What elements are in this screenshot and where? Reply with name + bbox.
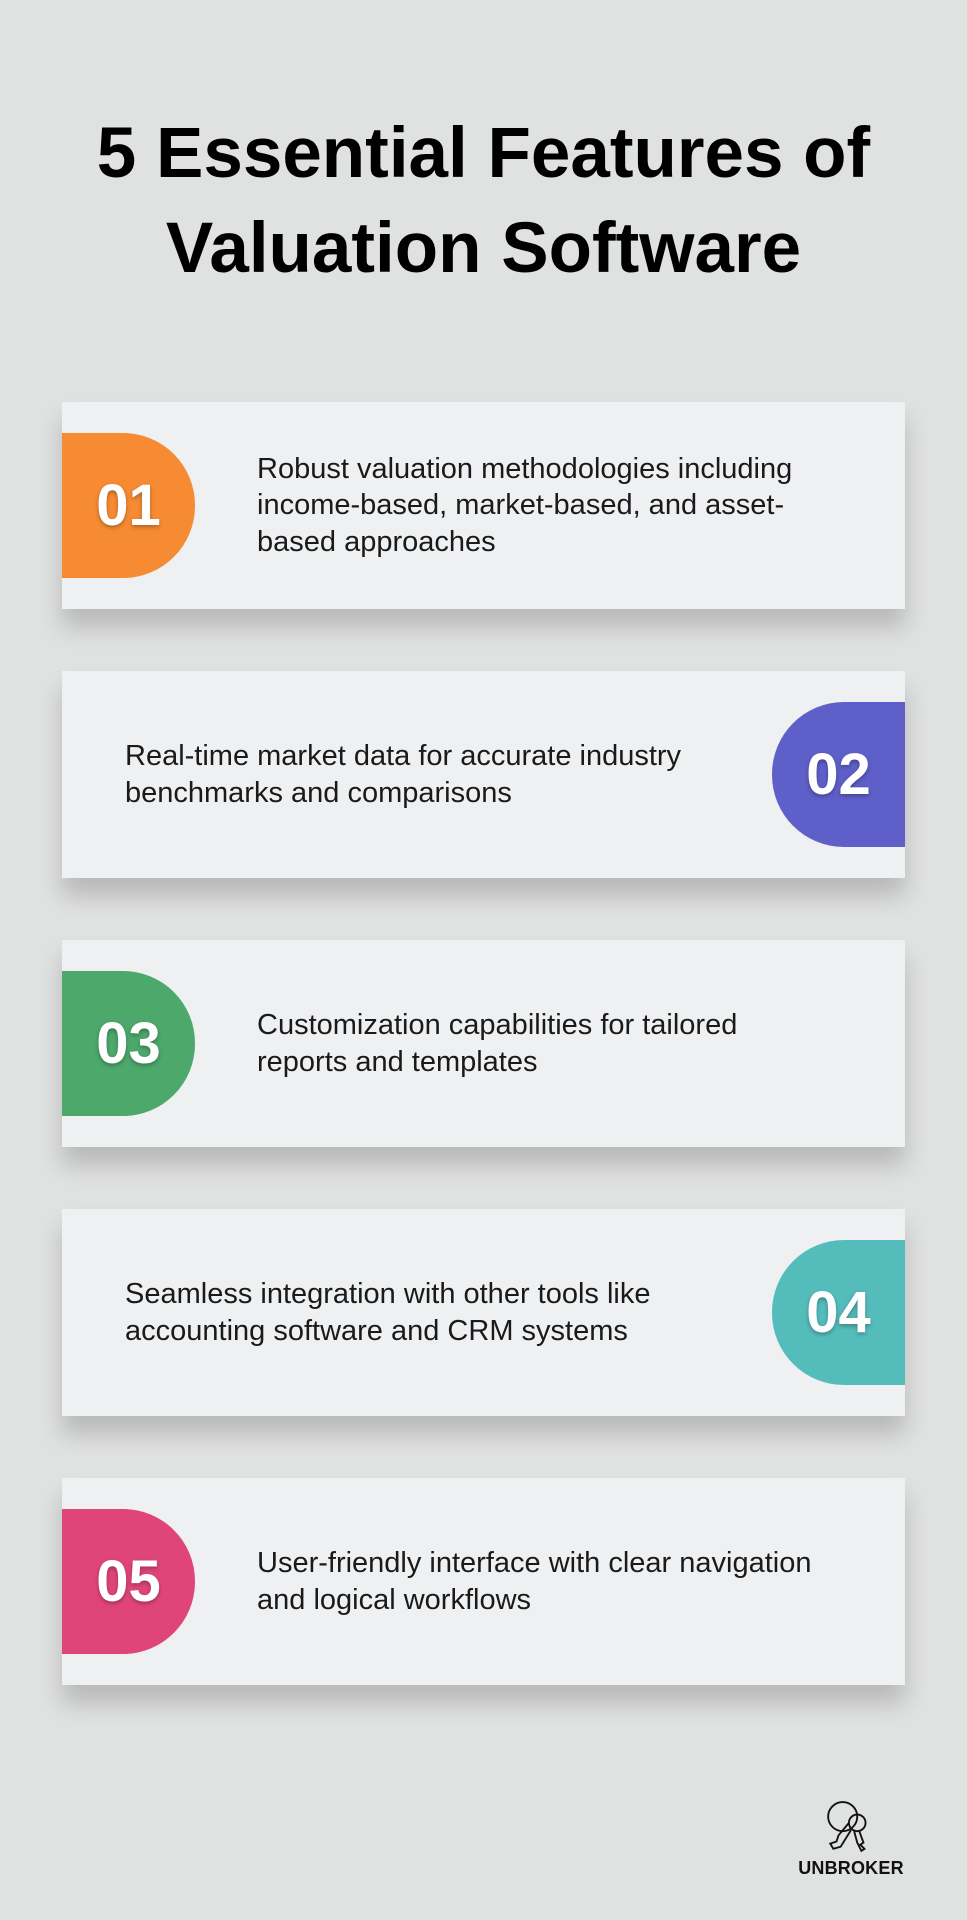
badge 02: [772, 702, 905, 847]
text 02: benchmarks and comparisons: [125, 776, 512, 808]
text 03: reports and templates: [257, 1046, 537, 1078]
text 04: accounting software and CRM systems: [125, 1314, 628, 1346]
badge 04: [772, 1240, 905, 1385]
badge 04: 04: [806, 1280, 871, 1345]
text 05: and logical workflows: [257, 1584, 531, 1616]
text 03: [257, 1009, 737, 1078]
badge 03: 03: [96, 1011, 161, 1076]
badge 02: 02: [806, 742, 871, 807]
text 01: based approaches: [257, 526, 496, 558]
panel: feature 04: [62, 1209, 905, 1416]
text 03: Customization capabilities for tailored: [257, 1009, 737, 1041]
text 05: [257, 1547, 811, 1616]
badge 01: [62, 433, 195, 578]
text 04: Seamless integration with other tools like: [125, 1278, 650, 1310]
text 05: User-friendly interface with clear navigation: [257, 1547, 811, 1579]
logo text: UNBROKER: [798, 1858, 904, 1878]
text 04: [125, 1278, 650, 1346]
text 02: Real-time market data for accurate industry: [125, 740, 681, 772]
logo: unbroker: [798, 1801, 904, 1878]
text 02: [125, 740, 681, 808]
title: 5 Essential Features of: [97, 114, 870, 193]
badge 01: 01: [96, 473, 161, 538]
badge 03: [62, 971, 195, 1116]
badge 05: [62, 1509, 195, 1654]
panel: feature 02: [62, 671, 905, 878]
title: Valuation Software: [166, 209, 801, 288]
panel: feature 03: [62, 940, 905, 1147]
text 01: Robust valuation methodologies including: [257, 453, 792, 485]
panel: feature 01: [62, 402, 905, 609]
badge 05: 05: [96, 1549, 161, 1614]
title: [97, 114, 870, 288]
panel: feature 05: [62, 1478, 905, 1685]
text 01: income-based, market-based, and asset-: [257, 489, 784, 521]
text 01: [257, 453, 792, 558]
icon: keys: [827, 1801, 866, 1852]
